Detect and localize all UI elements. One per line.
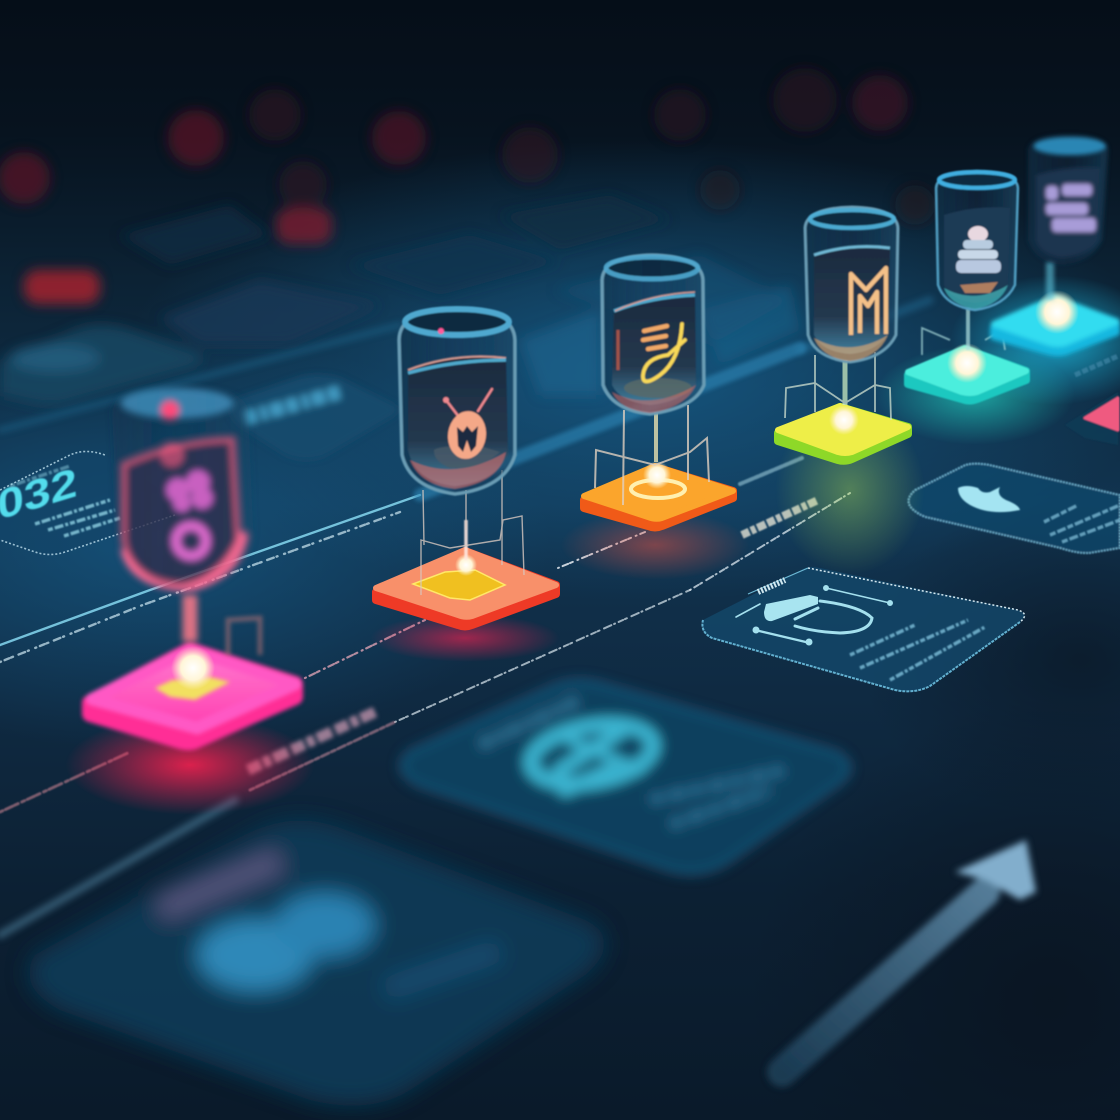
card body text <box>850 620 985 680</box>
icon: flower and ring <box>166 470 213 512</box>
vial <box>602 255 704 414</box>
step 6: cyan platform and vial <box>994 134 1116 352</box>
platform base <box>994 298 1116 352</box>
panel: diagram card centre right <box>702 567 1025 691</box>
step 5: teal platform and vial <box>908 171 1026 400</box>
icon: blurred at-sign <box>526 716 658 792</box>
icon: peach M glyph <box>851 268 886 335</box>
timeline line: lower dashed rail <box>0 493 850 935</box>
bracket wires <box>228 618 260 655</box>
glowing bulb <box>455 554 477 576</box>
stem <box>182 595 198 642</box>
platform glow reflections <box>65 275 1120 815</box>
step 3: orange platform and vial <box>584 255 733 528</box>
glowing ring <box>631 480 685 498</box>
vial <box>1028 134 1108 265</box>
glowing bulb <box>829 405 859 435</box>
timeline line: bright upper rail <box>0 300 930 662</box>
glowing bulb <box>1035 290 1079 334</box>
panel: blurred card centre <box>402 681 849 872</box>
vial <box>112 388 253 592</box>
vial <box>936 171 1018 310</box>
yellow pad <box>413 570 505 600</box>
bracket wires <box>595 405 709 505</box>
card body text <box>1044 505 1120 542</box>
glowing bulb <box>947 343 987 383</box>
glowing bulb <box>171 646 215 690</box>
platform base <box>376 551 556 626</box>
panel: heavily blurred card bottom left <box>29 820 605 1106</box>
platform base <box>778 407 908 461</box>
icon: device diagram <box>736 586 892 645</box>
caption: small label lower rail <box>742 500 818 535</box>
stem <box>464 520 468 560</box>
stem <box>1046 262 1054 300</box>
vial <box>399 308 515 494</box>
card small heading <box>758 580 785 592</box>
glowing bulb <box>643 461 671 489</box>
icon: fan shape <box>958 486 1020 512</box>
step 1: pink platform and blurred vial <box>90 388 295 742</box>
icon: lavender glyph <box>1046 184 1096 232</box>
step 4: lime platform and vial <box>778 207 908 461</box>
icon: stacked drum <box>956 226 1001 293</box>
vial <box>805 207 898 362</box>
icon: yellow swirl <box>643 324 685 382</box>
blurred red background lights <box>0 68 935 304</box>
bracket wires <box>785 352 891 420</box>
bracket wires <box>421 470 524 595</box>
panel: pink-edged card far right <box>1065 356 1118 445</box>
icon: antenna face <box>443 389 492 461</box>
icon: blurred blobs <box>160 860 500 991</box>
card body text <box>10 466 120 536</box>
panel: 032 data card left <box>0 452 175 554</box>
panel: blurred label top left <box>230 375 398 460</box>
blurred distant panels <box>0 195 800 405</box>
timeline line: middle dashed rail <box>0 458 802 812</box>
panel: fan icon card right <box>908 464 1120 553</box>
platform base <box>908 348 1026 400</box>
platform base <box>90 650 295 742</box>
caption: blurred label near pink base <box>248 712 375 770</box>
platform base <box>584 467 733 528</box>
bracket wires <box>922 308 1005 355</box>
step 2: coral platform and vial <box>376 308 556 626</box>
arrow: direction of process <box>782 840 1036 1072</box>
yellow pad <box>155 677 230 700</box>
card body text <box>650 770 785 825</box>
